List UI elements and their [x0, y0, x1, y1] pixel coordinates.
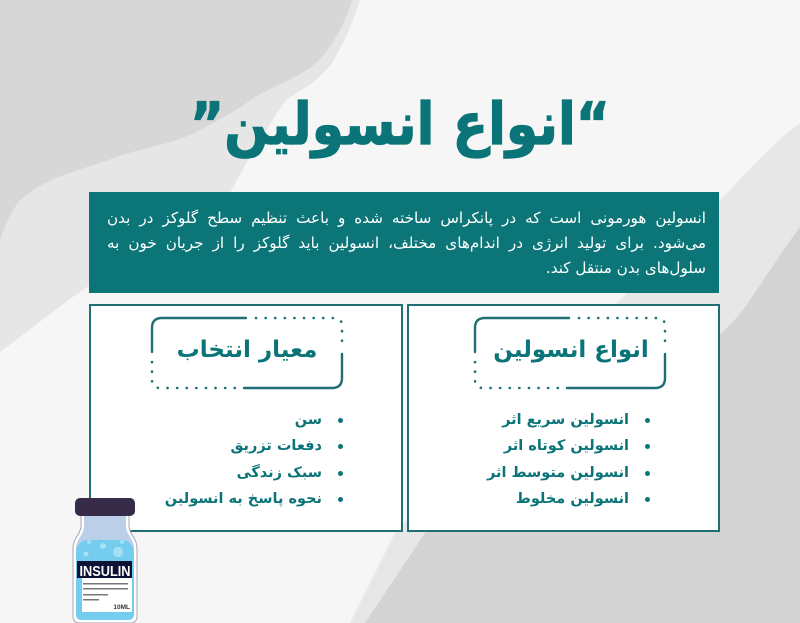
list: selection criteria: نحوه پاسخ به انسولین [165, 491, 322, 507]
vial cap [75, 498, 135, 516]
intro text banner: انسولین هورمونی است که در پانکراس ساخته شده و باعث تنظیم سطح گلوکز در بدن [107, 209, 706, 227]
panel: selection criteria [89, 304, 403, 532]
panel: insulin types [407, 304, 720, 532]
intro text banner: می‌شود. برای تولید انرژی در اندام‌های مختلف، انسولین باید گلوکز را از جریان خون به [107, 234, 706, 252]
vial label [77, 561, 132, 612]
vial label: 10ML [113, 604, 130, 611]
list: insulin types [486, 412, 650, 507]
list: selection criteria: سن [295, 412, 322, 428]
heading: selection criteria: معیار انتخاب [177, 337, 317, 363]
icon: insulin vial [72, 498, 138, 623]
list: insulin types: انسولین کوتاه اثر [504, 438, 629, 454]
list: selection criteria: سبک زندگی [237, 465, 322, 481]
intro text banner [89, 192, 719, 293]
heading frame: selection criteria [150, 316, 344, 390]
title: “انواع انسولین” [190, 90, 610, 158]
list: selection criteria [165, 412, 343, 507]
list: insulin types: انسولین سریع اثر [502, 412, 629, 428]
list: insulin types: انسولین متوسط اثر [487, 465, 629, 481]
list: selection criteria: دفعات تزریق [230, 438, 322, 454]
vial label: INSULIN [80, 563, 130, 580]
list: insulin types: انسولین مخلوط [516, 491, 629, 507]
heading: insulin types: انواع انسولین [493, 337, 649, 363]
heading frame: insulin types [474, 316, 666, 390]
intro text banner: سلول‌های بدن منتقل کند. [546, 259, 706, 277]
